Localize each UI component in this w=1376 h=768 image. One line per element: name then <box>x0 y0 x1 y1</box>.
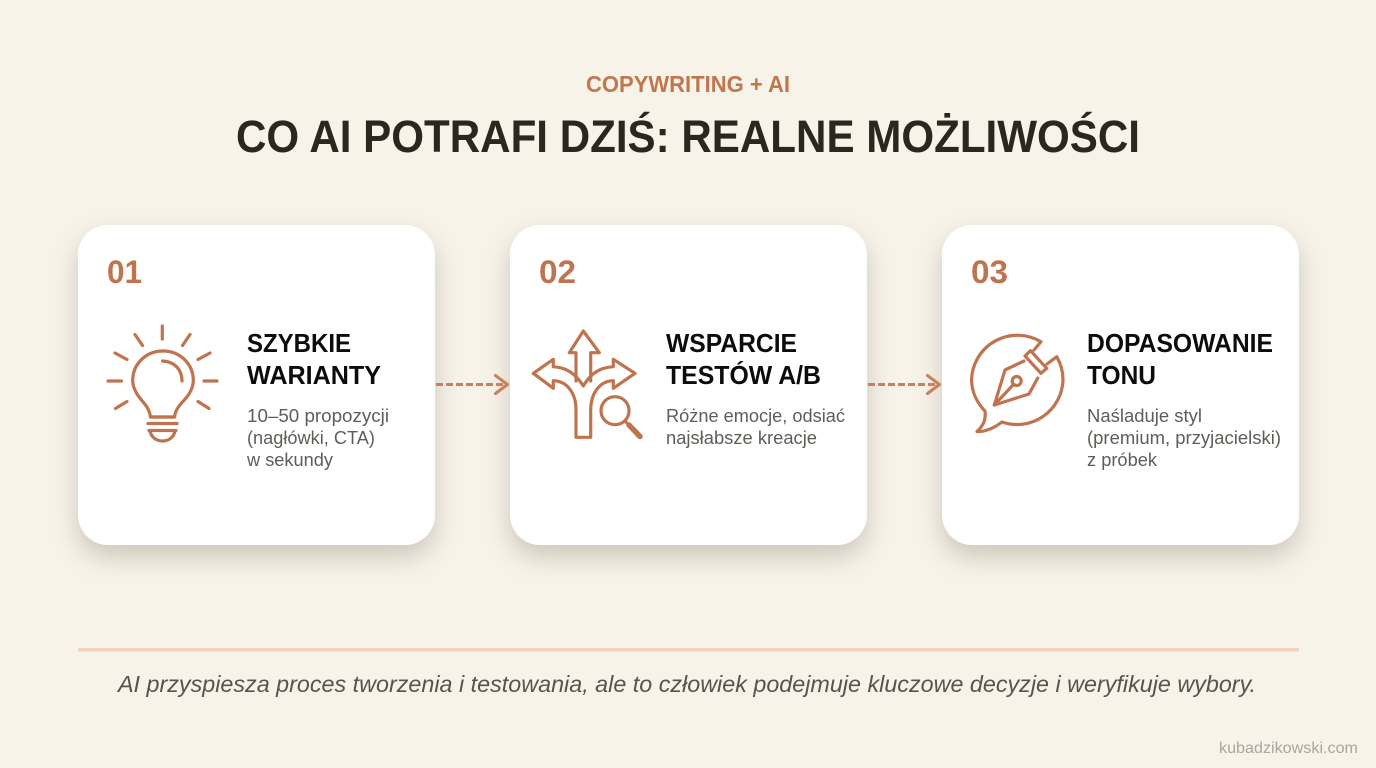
icon: branching arrows with magnifier <box>533 331 640 437</box>
heading: TESTÓW A/B <box>666 360 821 390</box>
panel: card 03 <box>942 225 1299 557</box>
heading: SZYBKIE <box>247 328 351 358</box>
arrow: card 02 to card 03 <box>868 376 940 394</box>
description: Naśladuje styl <box>1087 406 1202 426</box>
description: Różne emocje, odsiać <box>666 406 845 426</box>
heading <box>666 328 821 390</box>
description <box>246 406 389 470</box>
description: z próbek <box>1087 450 1158 470</box>
heading <box>247 328 381 390</box>
heading: WSPARCIE <box>666 328 797 358</box>
panel: card 01 <box>78 225 435 557</box>
arrow: card 01 to card 02 <box>436 376 508 394</box>
heading: TONU <box>1087 360 1156 390</box>
description <box>1087 406 1281 470</box>
description <box>666 406 845 448</box>
description: (nagłówki, CTA) <box>247 428 375 448</box>
heading <box>1087 328 1273 390</box>
heading: WARIANTY <box>247 360 381 390</box>
heading: DOPASOWANIE <box>1087 328 1273 358</box>
description: w sekundy <box>246 450 333 470</box>
number 01: 01 <box>107 254 142 290</box>
description: 10–50 propozycji <box>247 406 389 426</box>
icon: light bulb <box>108 326 217 441</box>
eyebrow label: COPYWRITING + AI <box>586 71 790 97</box>
closing statement: AI przyspiesza proces tworzenia i testowania, ale to człowiek podejmuje kluczowe decyzje i weryfikuje wybory. <box>116 671 1256 697</box>
icon: speech bubble with pen nib <box>972 335 1063 432</box>
description: (premium, przyjacielski) <box>1087 428 1281 448</box>
description: najsłabsze kreacje <box>666 428 817 448</box>
title: CO AI POTRAFI DZIŚ: REALNE MOŻLIWOŚCI <box>236 111 1140 162</box>
number 03: 03 <box>971 254 1008 290</box>
watermark: kubadzikowski.com <box>1219 740 1358 757</box>
panel: card 02 <box>510 225 867 557</box>
number 02: 02 <box>539 254 576 290</box>
